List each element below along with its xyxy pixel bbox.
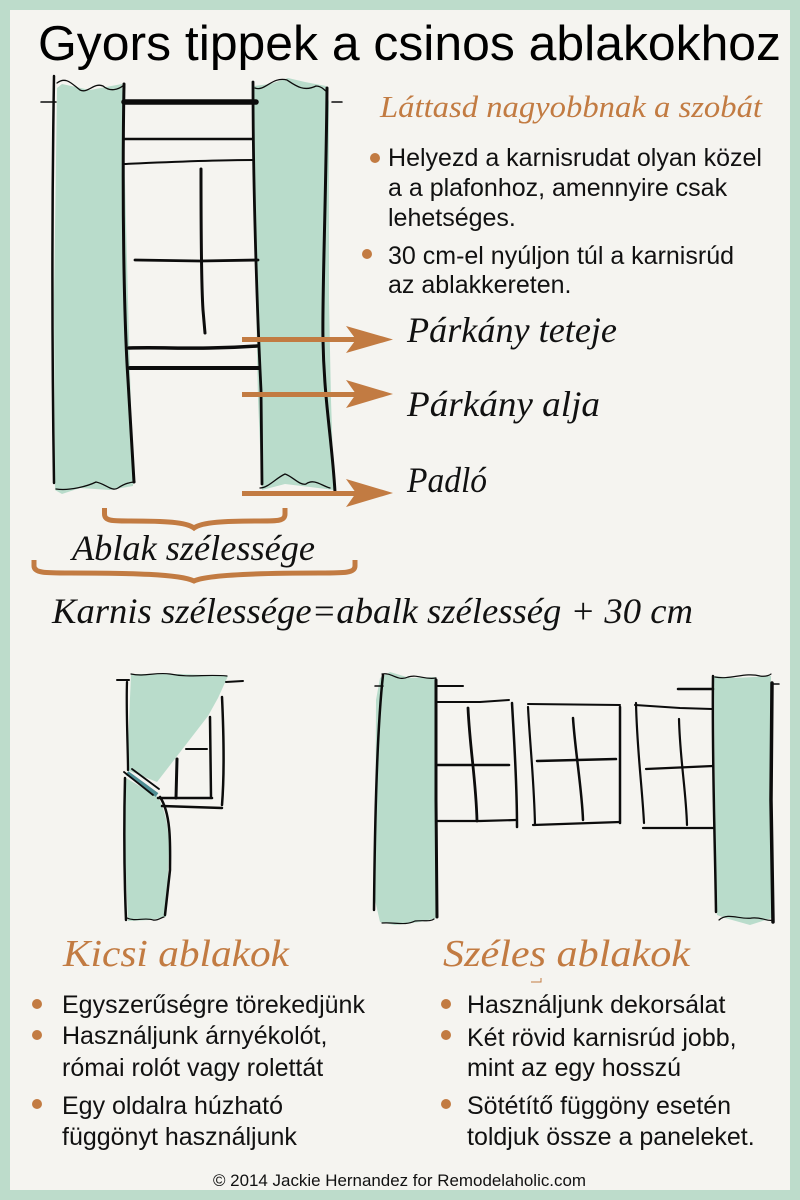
label: window width: Ablak szélessége xyxy=(70,528,315,568)
curtain: right xyxy=(254,78,334,490)
diagram: small window with tied-back curtain xyxy=(117,674,243,921)
window frame lines xyxy=(124,139,259,368)
window 3 xyxy=(635,703,713,828)
arrow: sill top xyxy=(242,326,393,353)
footer credit: © 2014 Jackie Hernandez for Remodelaholic.com xyxy=(213,1172,586,1190)
curtain: right xyxy=(714,676,772,925)
bulleted text: wide window tips: mint az egy hosszú xyxy=(467,1054,681,1082)
curtain: left xyxy=(375,672,437,925)
arrow: floor xyxy=(242,479,393,507)
curtain: lower section xyxy=(125,778,169,921)
bulleted text: small window tips: római rolót vagy rolettát xyxy=(62,1054,323,1082)
curtain: left xyxy=(54,84,133,494)
tieback xyxy=(124,769,159,795)
diagram: wide windows with two curtains xyxy=(374,672,779,925)
bulleted text: wide window tips: toldjuk össze a paneleket. xyxy=(467,1123,755,1151)
label: sill top: Párkány teteje xyxy=(406,310,617,350)
label: floor: Padló xyxy=(406,460,487,500)
arrow: sill bottom xyxy=(242,380,393,408)
window lines xyxy=(117,680,243,808)
bulleted text: small window tips: Egy oldalra húzható xyxy=(62,1092,283,1120)
bulleted text: small window tips: Egyszerűségre törekedjünk xyxy=(62,991,365,1019)
brace: window width xyxy=(104,508,285,528)
curtain outlines xyxy=(52,76,335,492)
bulleted text: room tips: a a plafonhoz, amennyire csak xyxy=(388,174,728,202)
bulleted text: room tips: Helyezd a karnisrudat olyan közel xyxy=(388,144,762,172)
curtain: upper tied section xyxy=(127,674,228,782)
curtain rod xyxy=(41,99,342,105)
bulleted text: small window tips: függönyt használjunk xyxy=(62,1123,297,1151)
bulleted text: wide window tips: Két rövid karnisrúd jobb, xyxy=(467,1024,737,1052)
bulleted text: room tips: 30 cm-el nyúljon túl a karnisrúd xyxy=(388,242,734,270)
window 1 xyxy=(436,700,517,827)
heading: make the room look bigger: Láttasd nagyobbnak a szobát xyxy=(379,89,763,124)
heading: wide windows: Széles ablakok xyxy=(443,933,691,975)
bulleted text: room tips: lehetséges. xyxy=(388,204,516,232)
brace: rod width xyxy=(34,560,355,581)
heading: small windows: Kicsi ablakok xyxy=(62,933,290,975)
stray mark xyxy=(531,978,541,982)
bulleted text: wide window tips: Sötétítő függöny esetén xyxy=(467,1092,731,1120)
diagram: window with full-length curtains xyxy=(41,76,393,507)
bulleted text: room tips: az ablakkereten. xyxy=(388,271,571,299)
formula: rod width: Karnis szélessége=abalk szélesség + 30 cm xyxy=(51,591,693,631)
bulleted text: small window tips xyxy=(32,991,365,1151)
bulleted text: small window tips: Használjunk árnyékolót, xyxy=(62,1022,327,1050)
bulleted text: wide window tips: Használjunk dekorsálat xyxy=(467,991,726,1019)
title: Gyors tippek a csinos ablakokhoz xyxy=(38,17,781,71)
bulleted text: room tips xyxy=(362,144,762,299)
curtain rods and outlines xyxy=(374,674,779,924)
label: sill bottom: Párkány alja xyxy=(406,384,600,424)
bulleted text: wide window tips xyxy=(441,991,755,1151)
curtain outlines xyxy=(124,674,227,920)
window 2 xyxy=(528,704,620,825)
